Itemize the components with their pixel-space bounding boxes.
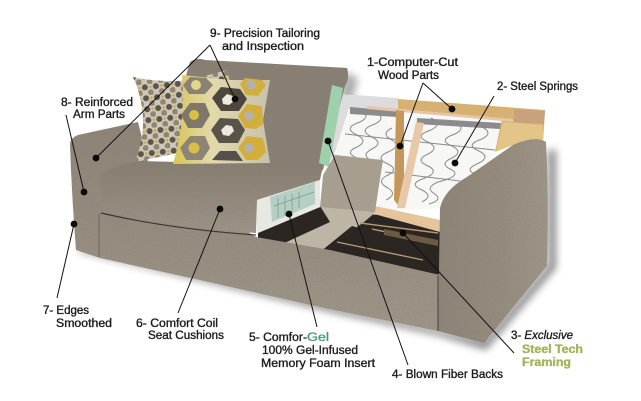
callout leaders [57, 45, 514, 365]
memory foam side [257, 180, 320, 233]
label 3: 3- Exclusive [511, 330, 573, 342]
hexagon: grey lower left [180, 136, 210, 160]
label 6 [136, 318, 224, 342]
back cushion [170, 59, 348, 170]
label 3 [511, 330, 583, 369]
hexagon: dark top [212, 87, 247, 111]
small patterned pillow [133, 70, 240, 162]
right arm [438, 139, 548, 343]
steel deck [258, 206, 440, 280]
arm front crease [98, 214, 100, 257]
leader 3 [403, 233, 514, 353]
hexagon: yellow lower right [238, 136, 266, 160]
hexagon: dark middle [211, 118, 245, 143]
hexagon: grey left [181, 103, 210, 128]
large hexagon pillow [173, 75, 270, 164]
label 8: Arm Parts [73, 109, 125, 121]
label 6: 6- Comfort Coil [136, 318, 218, 330]
bottom wood rail [375, 206, 440, 232]
label 1: 1-Computer-Cut [367, 57, 459, 69]
leader 9 [96, 45, 235, 158]
grey frame band [350, 107, 501, 129]
interior frame and springs [330, 94, 545, 232]
label 6: Seat Cushions [148, 330, 224, 342]
label 1 [367, 57, 459, 82]
leader 8 [66, 115, 84, 192]
leader 2 [455, 96, 494, 163]
pillow body [173, 75, 270, 164]
hexagon: yellow right [238, 104, 263, 129]
floor shadow [78, 150, 556, 350]
sofa left arm and base silhouette [70, 122, 440, 331]
label 5 [249, 332, 376, 370]
steel rails [337, 223, 438, 260]
foam back panel [330, 94, 398, 155]
light webbing [280, 206, 376, 252]
back cushion shadow [328, 72, 358, 165]
white spring deck [334, 108, 505, 212]
beige seat foundation [320, 155, 383, 212]
hexagon: yellow top right [240, 78, 266, 96]
light wood rail [367, 106, 513, 122]
vertical wood post [394, 110, 404, 205]
label 9 [210, 28, 320, 53]
label 3: Steel Tech [522, 344, 583, 356]
label 5: 5- Comfor- [249, 332, 307, 344]
callout dots [71, 96, 458, 236]
label 5: 100% Gel-Infused [262, 345, 358, 357]
label 8: 8- Reinforced [61, 97, 133, 109]
cushion seam [101, 213, 256, 235]
label 4: 4- Blown Fiber Backs [392, 369, 503, 381]
wood corner block [514, 109, 545, 124]
label 3: Framing [522, 357, 571, 369]
seat cushion [100, 161, 323, 233]
label 5: Gel [307, 332, 329, 344]
label 5: Memory Foam Insert [261, 358, 376, 370]
hexagon: dark bottom [212, 151, 243, 161]
label 7: Smoothed [56, 318, 112, 330]
leader 4 [328, 141, 408, 365]
label 7: 7- Edges [43, 305, 89, 317]
label 9: 9- Precision Tailoring [210, 28, 320, 40]
leader 6 [178, 209, 220, 313]
label 2: 2- Steel Springs [497, 81, 578, 93]
diagonal wood brace [397, 122, 424, 208]
label 8 [61, 97, 133, 121]
foam coil insert [270, 182, 315, 222]
green gel layer [319, 85, 343, 167]
label 9: and Inspection [222, 41, 304, 53]
steel springs [345, 110, 495, 204]
label 7 [43, 305, 112, 330]
leader 1 [400, 83, 452, 146]
leader 7 [57, 224, 74, 298]
leader 5 [289, 214, 317, 327]
label 1: Wood Parts [378, 70, 439, 82]
hexagon: tan top left [183, 77, 213, 94]
wood top rail [398, 99, 545, 152]
cushion fabric [100, 161, 323, 233]
dark deck [258, 207, 440, 280]
